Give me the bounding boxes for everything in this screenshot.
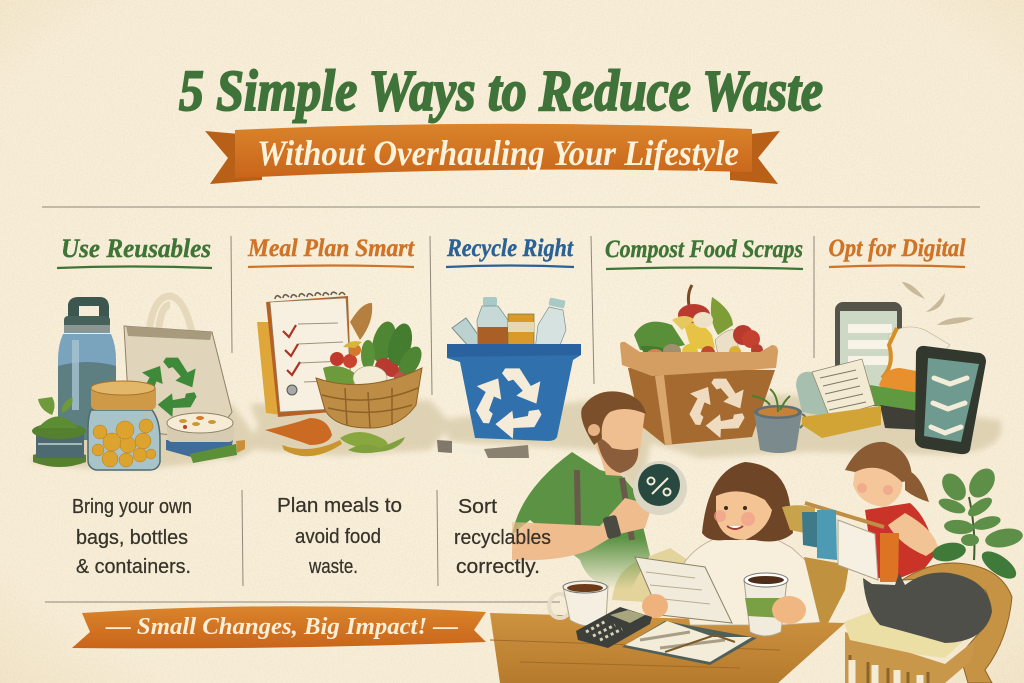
title: 5 Simple Ways to Reduce Waste — [179, 58, 823, 123]
icon: glass jar — [88, 381, 160, 470]
top divider — [42, 206, 980, 208]
bottom divider — [45, 601, 560, 603]
icon: chair behind woman — [782, 505, 849, 623]
illustration: bag behind woman — [612, 548, 688, 604]
text: Plan meals: Plan meals to — [277, 494, 402, 517]
column dividers — [231, 236, 814, 586]
icon: badge held by man — [633, 461, 687, 515]
text: Plan meals — [277, 494, 402, 578]
illustration: man — [512, 391, 652, 590]
icon: hanging bottles and planner — [802, 503, 899, 582]
icon: tote bag — [124, 296, 232, 440]
icon: potted sprout — [752, 389, 806, 453]
heading: Meal Plan Smart: Meal Plan Smart — [247, 235, 415, 262]
text: Sort recyclables: recyclables — [454, 526, 551, 549]
illustration: meal plan — [257, 292, 426, 456]
icon: receipt printer — [796, 359, 881, 438]
text: Bring your own: bags, bottles — [76, 526, 188, 549]
icon: basket of vegetables — [316, 303, 426, 428]
subtitle banner — [205, 124, 780, 184]
text: Sort recyclables — [454, 495, 551, 578]
icon: recycle symbol on bin — [466, 368, 543, 445]
text: Bring your own: & containers. — [76, 555, 191, 578]
illustration: girl — [845, 442, 938, 578]
icon: wooden bin — [620, 342, 778, 445]
icon: leafy plant — [931, 464, 1024, 584]
text: Bring your own: Bring your own — [72, 495, 192, 518]
bottom banner: — Small Changes, Big Impact! — — [105, 614, 458, 640]
icon: water bottle — [58, 297, 116, 440]
icon: food scraps — [634, 285, 763, 360]
icon: coffee cup — [549, 581, 608, 626]
icon: tablet — [835, 302, 902, 406]
text: Sort recyclables: correctly. — [456, 555, 540, 578]
ground shadows — [30, 392, 1001, 500]
icon: smartphone — [915, 346, 986, 454]
icon: green travel mug — [744, 573, 806, 636]
illustration: compost bin — [620, 285, 806, 453]
icon: paper bag and food box — [870, 327, 950, 430]
icon: green stacked container — [32, 397, 86, 467]
icon: sleeping cat — [863, 572, 992, 643]
text: Bring your own — [72, 495, 192, 578]
icon: open book — [622, 621, 757, 665]
heading: Use Reusables: Use Reusables — [61, 234, 211, 263]
icon: tablet screen — [840, 311, 897, 399]
icon: calculator — [576, 607, 652, 648]
icon: lunch tin and tube — [166, 413, 245, 463]
text: Sort recyclables: Sort — [458, 495, 497, 518]
text: Plan meals: waste. — [308, 555, 358, 578]
heading: Opt for Digital: Opt for Digital — [828, 235, 966, 262]
subtitle banner: Without Overhauling Your Lifestyle — [257, 133, 739, 173]
illustration: digital — [796, 282, 986, 454]
illustration: woman — [635, 462, 824, 625]
icon: chili and beans — [265, 418, 405, 456]
icon: cutlery — [437, 440, 529, 458]
text: Plan meals: avoid food — [295, 525, 381, 548]
heading: Recycle Right: Recycle Right — [446, 235, 574, 262]
icon: cushion — [844, 612, 975, 658]
icon: notebook checklist — [257, 292, 352, 417]
illustration: recycling bin — [437, 297, 581, 458]
icon: floating paper scraps — [902, 282, 974, 325]
illustration: reusables — [32, 296, 245, 470]
heading: Compost Food Scraps: Compost Food Scraps — [605, 236, 803, 263]
illustration: table — [490, 613, 845, 683]
icon: bottles — [452, 297, 566, 350]
icon: wicker chair — [845, 563, 1012, 683]
bottom banner — [72, 606, 486, 648]
